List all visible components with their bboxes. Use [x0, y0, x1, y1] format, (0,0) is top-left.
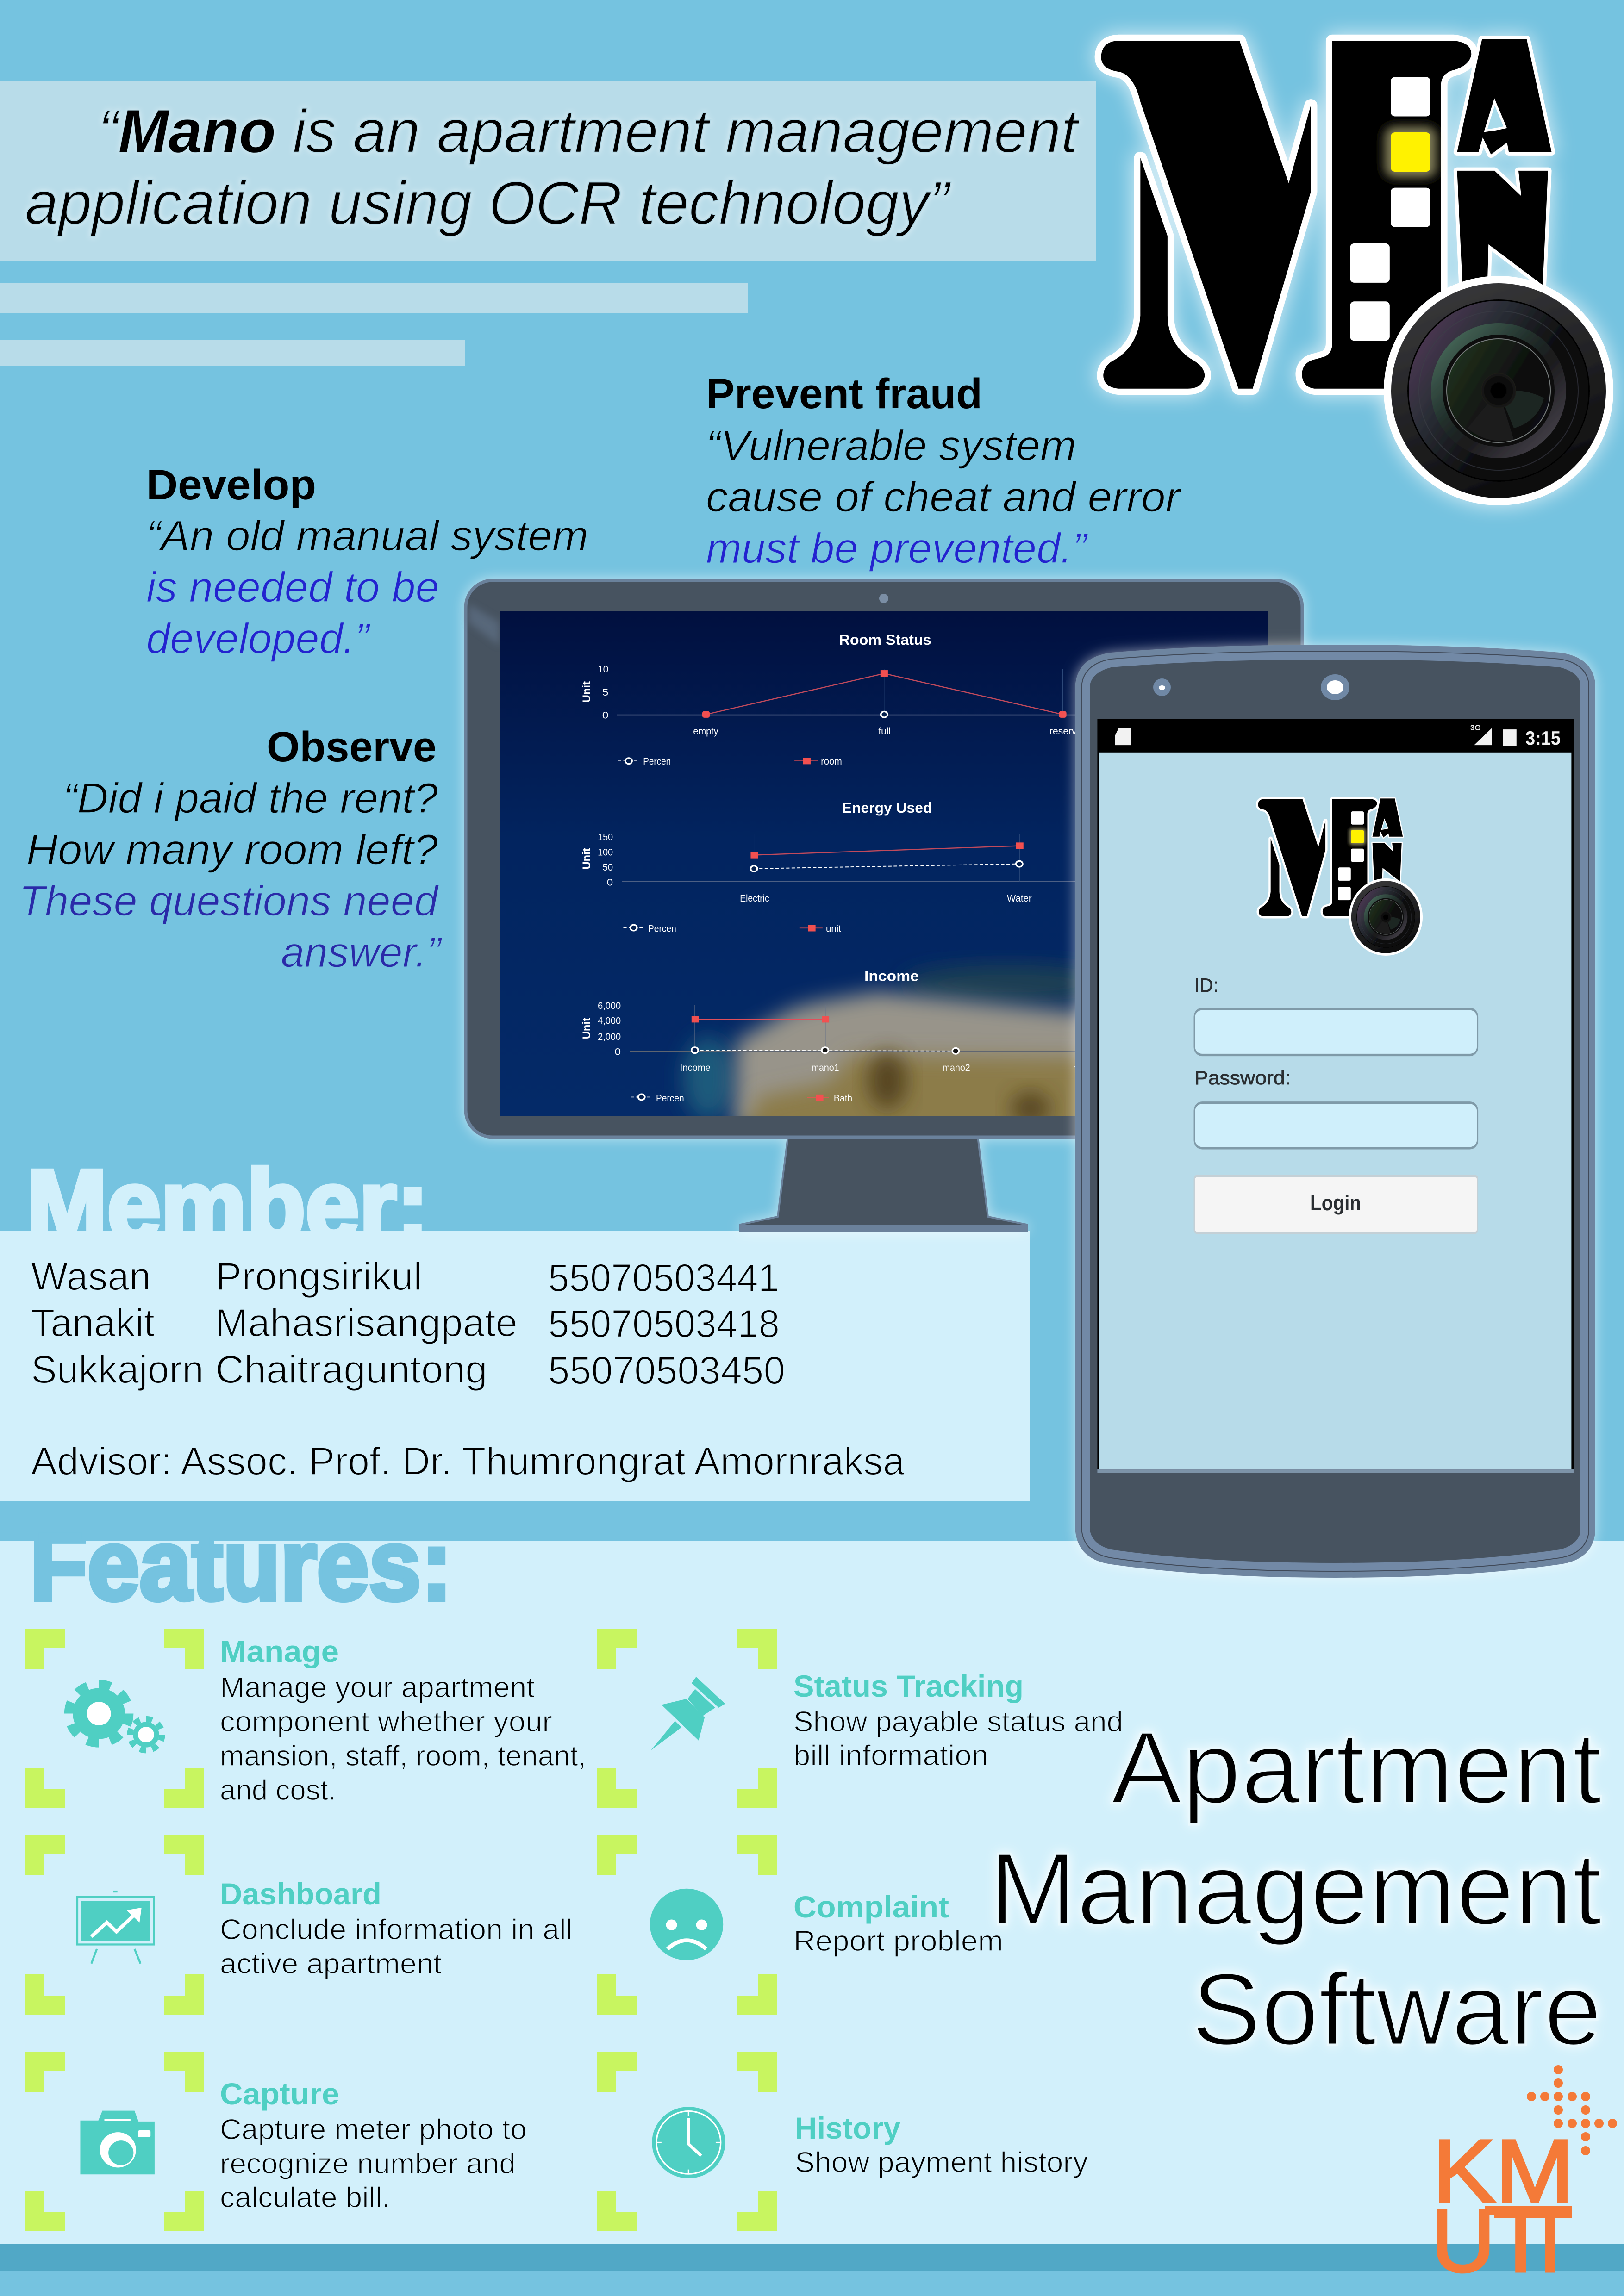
title: Apartment Management Software: Apartment: [1111, 1711, 1602, 1825]
text block: Prevent fraud: must be prevented.”: [706, 525, 1088, 572]
chart: Room Status: full: [878, 725, 891, 736]
chart: Income: Income: [680, 1062, 711, 1073]
login labels: Password:: [1194, 1067, 1291, 1089]
text block: Observe: [19, 723, 443, 976]
chart: Energy Used: 100: [598, 846, 613, 858]
chart: Energy Used: Energy Used: [842, 800, 932, 816]
heading: Member: Member:: [27, 1149, 429, 1261]
stand base strip: [740, 1225, 1027, 1231]
member list: [31, 1255, 905, 1483]
member list: Mahasrisangpate: [215, 1301, 518, 1344]
text block: Develop: is needed to be: [146, 564, 439, 611]
chart: Income: Percen: [656, 1092, 684, 1104]
quote text: application using OCR technology”: [25, 169, 951, 237]
member list: 55070503418: [548, 1302, 780, 1345]
feature text: Dashboard: Conclude information in all: [220, 1914, 573, 1946]
status bar time: 3:15: [1525, 727, 1561, 749]
footer strip: [0, 2244, 1624, 2271]
title: Apartment Management Software: Management: [989, 1832, 1602, 1947]
chart: Income: mano3: [1073, 1062, 1101, 1073]
chart: Energy Used: Water: [1007, 892, 1032, 904]
login labels: Login: [1310, 1191, 1361, 1215]
chart: Energy Used: Unit: [580, 848, 593, 870]
feature text: Dashboard: [220, 1877, 573, 1980]
phone body: [1075, 645, 1595, 1578]
feature text: Capture: Capture meter photo to: [220, 2114, 527, 2146]
logo: KMUTT: [1431, 2065, 1617, 2290]
feature text: Manage: mansion, staff, room, tenant,: [220, 1740, 586, 1772]
feature text: Capture: recognize number and: [220, 2148, 516, 2180]
panel: members: [0, 1231, 1030, 1501]
icon: camera: [80, 2111, 155, 2174]
chart: Income: 4,000: [598, 1015, 621, 1026]
chart: Income: 0: [615, 1046, 621, 1057]
chart: Room Status: 10: [598, 663, 608, 675]
text block: Develop: “An old manual system: [146, 512, 588, 560]
chart: Energy Used: Electric: [740, 892, 769, 904]
feature text: Manage: and cost.: [220, 1774, 336, 1806]
quote text: “Mano is an apartment management: [98, 97, 1080, 165]
app logo: [1258, 798, 1423, 956]
text block: Prevent fraud: [706, 370, 1181, 572]
title: Apartment Management Software: Software: [1192, 1952, 1602, 2067]
text block: Develop: Develop: [146, 461, 316, 509]
text block: Observe: These questions need: [19, 877, 439, 925]
text block: Observe: Observe: [267, 723, 437, 771]
feature text: History: History: [795, 2111, 900, 2145]
chart: Room Status: empty: [693, 725, 718, 736]
decorative bar one: [0, 283, 748, 313]
chart: Room Status: room: [821, 755, 842, 767]
title: Apartment Management Software: [989, 1711, 1602, 2067]
monitor screen: [500, 611, 1278, 1139]
phone screen: [1097, 719, 1574, 1473]
icon: presentation board: [77, 1891, 154, 1964]
feature text: Complaint: [793, 1890, 1003, 1957]
member list: Chaitraguntong: [215, 1348, 487, 1391]
chart: Income: Unit: [580, 1018, 593, 1039]
feature text: Status Tracking: bill information: [793, 1740, 988, 1772]
login labels: [1194, 974, 1361, 1215]
text block: Develop: [146, 461, 588, 662]
feature text: Manage: [220, 1634, 586, 1806]
member list: 55070503441: [548, 1256, 779, 1300]
heading: Features: Features:: [30, 1509, 452, 1621]
corner brackets: [25, 1629, 777, 2231]
chart: Room Status: reserved: [1049, 725, 1087, 736]
monitor stand: [740, 1137, 1027, 1231]
member list: Tanakit: [31, 1301, 155, 1344]
quote text: [25, 97, 1080, 237]
chart: Income: 2,000: [598, 1031, 621, 1042]
chart: Income: 6,000: [598, 1000, 621, 1011]
chart: Energy Used: 0: [607, 877, 613, 888]
chart: Energy Used: [580, 800, 1108, 934]
feature text: Status Tracking: [793, 1669, 1123, 1772]
login labels: ID:: [1194, 974, 1218, 996]
text block: Observe: “Did i paid the rent?: [63, 775, 438, 822]
chart: Income: mano2: [943, 1062, 970, 1073]
chart: Energy Used: Percen: [648, 923, 676, 934]
feature text: Status Tracking: Status Tracking: [793, 1669, 1024, 1703]
blurred landscape background: [683, 965, 1278, 1139]
status bar network label: 3G: [1470, 723, 1481, 732]
text block: Prevent fraud: Prevent fraud: [706, 370, 982, 417]
chart: Income: mano1: [812, 1062, 839, 1073]
member list: 55070503450: [548, 1349, 785, 1392]
logo: KMUTT: UTT: [1431, 2191, 1577, 2290]
member list: Sukkajorn: [31, 1348, 204, 1391]
feature text: Dashboard: Dashboard: [220, 1877, 381, 1911]
text block: Observe: answer.”: [281, 929, 443, 976]
feature text: Manage: Manage: [220, 1634, 339, 1668]
chart: Room Status: 5: [602, 686, 608, 698]
feature text: Complaint: Complaint: [793, 1890, 949, 1924]
chart: Room Status: Room Status: [839, 632, 931, 648]
feature text: History: [795, 2111, 1088, 2178]
text block: Prevent fraud: cause of cheat and error: [706, 473, 1181, 521]
icon: push pin: [651, 1677, 725, 1750]
chart: Energy Used: 150: [598, 831, 613, 842]
chart: Income: Bath: [834, 1092, 852, 1104]
member list: Wasan: [31, 1255, 151, 1298]
feature text: History: Show payment history: [795, 2147, 1088, 2178]
decorative bar two: [0, 340, 465, 366]
feature text: Manage: Manage your apartment: [220, 1672, 535, 1704]
feature text: Capture: [220, 2077, 527, 2214]
chart: Room Status: Percen: [643, 755, 671, 767]
text block: Develop: developed.”: [146, 615, 371, 662]
feature text: Dashboard: active apartment: [220, 1948, 442, 1980]
feature icons: [69, 1677, 725, 2178]
member list: Advisor: Assoc. Prof. Dr. Thumrongrat Amornraksa: [31, 1439, 905, 1483]
icon: clock: [652, 2107, 725, 2178]
chart: Income: Income: [864, 968, 919, 984]
quote banner: [0, 81, 1096, 261]
icon: gears: [69, 1684, 162, 1750]
feature text: Capture: calculate bill.: [220, 2182, 390, 2214]
icon: sad face: [650, 1889, 723, 1960]
feature text: Complaint: Report problem: [793, 1925, 1003, 1957]
logo: KMUTT: KM: [1432, 2121, 1574, 2221]
panel: features: [0, 1541, 1624, 2244]
chart: Room Status: 0: [602, 709, 608, 721]
logo: Mano with camera lens: [1101, 39, 1613, 505]
feature text: Capture: Capture: [220, 2077, 339, 2111]
monitor webcam: [879, 594, 888, 603]
phone: [1075, 645, 1595, 1578]
chart: Room Status: [580, 632, 1108, 767]
feature text: Manage: component whether your: [220, 1706, 552, 1738]
monitor bezel: [466, 580, 1302, 1137]
monitor frame and stand: [466, 580, 1302, 1231]
member list: Prongsirikul: [215, 1255, 422, 1298]
phone camera and sensor: [1153, 674, 1349, 700]
text block: Prevent fraud: “Vulnerable system: [706, 422, 1076, 469]
text block: Observe: How many room left?: [26, 826, 438, 873]
chart: Income: [580, 968, 1108, 1104]
feature text: Status Tracking: Show payable status and: [793, 1706, 1123, 1738]
charts: [580, 632, 1108, 1104]
chart: Room Status: Unit: [580, 681, 593, 703]
chart: Energy Used: unit: [826, 923, 842, 934]
bezel highlight: [468, 604, 500, 646]
chart: Energy Used: 50: [603, 861, 613, 873]
